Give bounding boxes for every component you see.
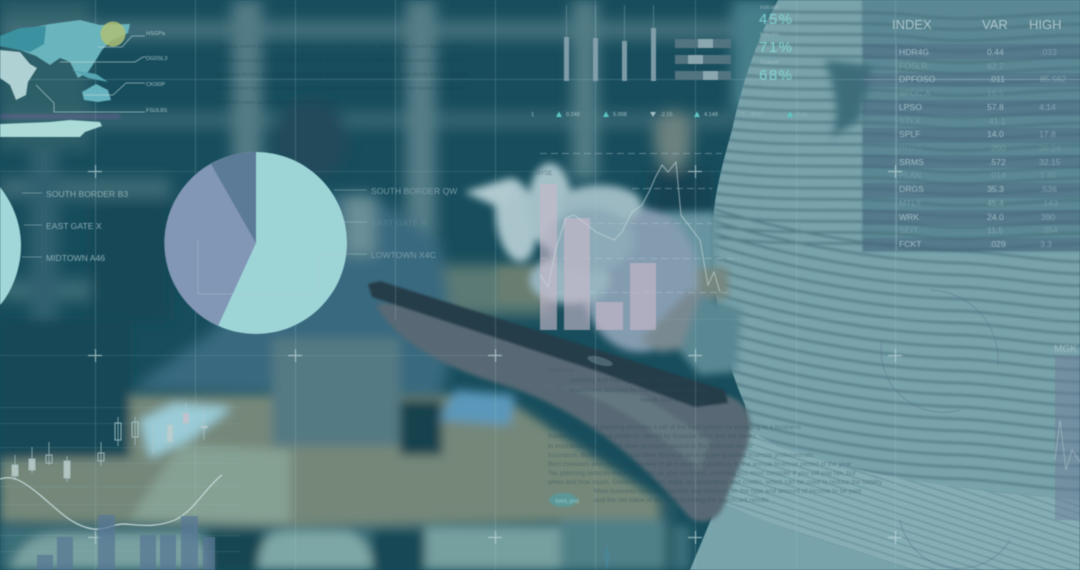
dashed levels [540, 154, 740, 292]
candlestick chart [12, 403, 207, 482]
smooth curve [0, 475, 222, 529]
table rows: 24.0 [987, 212, 1004, 222]
pie chart [164, 152, 347, 334]
bar and line chart over hand [536, 154, 740, 330]
paragraph text over forearm: in insurance markets and other accounts related to the financial sector [548, 443, 754, 450]
paragraph text over forearm: investment returned by earnings of the market [570, 387, 705, 394]
sweater body [690, 0, 1080, 570]
ticker row: 4.148 [704, 112, 718, 118]
forearm and hand [376, 303, 750, 521]
map: australia [82, 84, 111, 102]
labels: pie chart connectors: LOWTOWN X4C [371, 250, 436, 260]
table rows: 62.7 [987, 61, 1004, 71]
ticker row: -2.15 [660, 112, 673, 118]
table rows: DRGS [899, 184, 924, 194]
ticker row [531, 112, 808, 118]
table rows: FCKT [899, 239, 922, 249]
pink bars [540, 184, 656, 330]
map: callout lines [36, 36, 146, 112]
crosshair markers [88, 165, 902, 544]
table rows: .200 [989, 143, 1006, 153]
table rows: .029 [989, 239, 1006, 249]
table rows: 85.562 [1040, 74, 1067, 84]
paragraph text over forearm [547, 367, 883, 504]
decorative ring arcs on sweater [881, 290, 1010, 569]
table row bands [863, 44, 1080, 251]
paragraph text over forearm: and the net value of the fund including the significant results [594, 497, 770, 504]
table rows: 57.8 [987, 102, 1004, 112]
ticker row: 5.008 [613, 112, 627, 118]
bottom bar chart [37, 515, 215, 570]
paragraph text over forearm: when and how much. Government gives many tax deductions and credits, which can be used to reduce the liability [547, 479, 883, 486]
paragraph text over forearm: Financial [548, 367, 575, 374]
map: glow streak [0, 114, 120, 119]
table rows: 35.3 [987, 184, 1004, 194]
table rows: SEIT [899, 225, 919, 235]
table header: HIGH [1029, 17, 1062, 32]
table rows: PHAS [899, 143, 923, 153]
line series [540, 162, 720, 292]
paragraph text over forearm: trends and loan results [640, 397, 707, 404]
percentages panel: Channel [760, 60, 779, 66]
table rows: 41.1 [989, 116, 1006, 126]
pie slice: lavender [164, 152, 256, 326]
table rows: HDR4G [899, 47, 929, 57]
labels: left pie [22, 189, 128, 263]
percentages panel: Indicator [760, 32, 780, 38]
table rows: WRK [899, 212, 919, 222]
table rows: .572 [989, 157, 1006, 167]
table rows: 1.45 [1040, 170, 1057, 180]
pie slice: dark blue [211, 152, 256, 243]
table rows [899, 47, 1067, 249]
table header: VAR [982, 17, 1008, 32]
table rows: .014 [989, 170, 1006, 180]
percentages panel: 71% [759, 39, 794, 56]
map: eurasia [0, 20, 130, 78]
faint text block: top centre: Government reports and deductions for the current period and a review of the net market position here [218, 86, 467, 92]
map: antarctica [0, 120, 102, 137]
table header [892, 17, 1062, 32]
map: callout labels: FSUL8S [146, 108, 167, 114]
side chart: MGK [1054, 344, 1080, 520]
labels: left pie: MIDTOWN A46 [46, 253, 105, 263]
table rows: MTLY [899, 198, 922, 208]
paragraph text over forearm: Banking: services and products offered by financial firms and the banks [548, 433, 757, 440]
table rows: .354 [1041, 225, 1058, 235]
table rows: SRMS [899, 157, 924, 167]
faint text block: top centre [218, 44, 472, 106]
table rows: 17.8 [1039, 129, 1056, 139]
paragraph text over forearm: Most business income is taxable and depends on the type and amount of income to be paid [594, 488, 862, 495]
ticker row: 9047 [751, 112, 763, 118]
map: africa [0, 50, 37, 100]
top bar chart [564, 5, 656, 81]
table rows: 4.14 [1039, 102, 1056, 112]
diamond marker [604, 544, 610, 570]
desk and lower room [0, 320, 690, 570]
map: yellow highlight [100, 22, 126, 46]
window frames and blurred office background [0, 0, 778, 400]
table rows: 390 [1041, 212, 1056, 222]
ticker row: 0.21 [797, 112, 808, 118]
tablet [368, 281, 728, 407]
faint text block: top centre: Investment products and financial planning of the annual budget with the overall portfolio and returns [218, 58, 463, 64]
faint text block: top centre: Banking market performance and general market index summary report for the current quarter and fiscal [218, 44, 472, 50]
paragraph text over forearm: Advice: Financial planning provides a set of the best options for investing in a business [548, 424, 802, 431]
ticker row: 1 [531, 112, 534, 118]
table rows: 16.5 [987, 88, 1004, 98]
paragraph text over forearm: Insurance, Business, taxes and other financial services are qualified financial professionals. [548, 452, 815, 459]
map: callout labels: HSGPa [146, 31, 166, 37]
map: callout labels: CK0I0P [146, 82, 166, 88]
map: callout labels: DG0SL3 [146, 56, 167, 62]
table rows: 32.15 [1039, 157, 1061, 167]
table rows: .143 [1041, 198, 1058, 208]
table rows: DPFOSO [899, 74, 936, 84]
paragraph text over forearm: Tax planning reduces the income tax on your business, meaning you must consider if you will pay tax, but [548, 470, 856, 477]
map: callout labels [146, 31, 167, 114]
table rows: SPLF [899, 129, 920, 139]
table rows: 45.4 [987, 198, 1004, 208]
ticker row: 0.248 [566, 112, 580, 118]
heat strips [675, 39, 731, 80]
paragraph text over forearm: Best investors also report and review of all investment products in the annual financial period of the year [548, 461, 852, 468]
percentages panel: 68% [759, 67, 794, 84]
table rows: 14.0 [987, 129, 1004, 139]
faint text block: top centre: Business income and expenditure trends in the current quarter against the prior period and the forecast [218, 72, 469, 78]
table rows: .033 [1040, 47, 1057, 57]
labels: left pie: SOUTH BORDER B3 [46, 189, 128, 199]
paragraph text over forearm: planning and management of the personal accounts [570, 377, 722, 384]
table rows: LPSO [899, 102, 922, 112]
index table [863, 17, 1080, 250]
small teal logo mark [549, 493, 579, 507]
table rows: 3.3 [1040, 239, 1052, 249]
faint text block: top centre: Fund allocation and the significant market results [218, 100, 337, 106]
percentages panel: 45% [759, 11, 794, 28]
typing hand [464, 163, 742, 375]
labels: pie chart connectors: SOUTH BORDER QW [371, 186, 458, 196]
world map with callouts [0, 20, 167, 137]
labels: pie chart connectors: EAST GATE R [371, 218, 427, 228]
table rows: 20.24 [1039, 143, 1061, 153]
map: west asia darker [0, 26, 46, 52]
table header: INDEX [892, 17, 932, 32]
labels: left pie: EAST GATE X [46, 221, 102, 231]
map: islands [72, 70, 108, 82]
table rows: .536 [1040, 184, 1057, 194]
chart caption: NYSE [536, 171, 552, 177]
table rows: 11.5 [987, 225, 1003, 235]
table rows: .011 [989, 74, 1005, 84]
table rows: 0.44 [987, 47, 1004, 57]
partial pie chart at left edge [0, 187, 21, 305]
side chart: MGK: MGK [1054, 344, 1077, 355]
percentages panel: Indicator [760, 5, 780, 11]
small teal logo mark: WetLand [555, 499, 579, 505]
table rows: SPDC A [899, 88, 931, 98]
percentages panel [759, 5, 794, 84]
cuff [726, 432, 1080, 570]
table rows: FOSLR [899, 61, 928, 71]
labels: pie chart connectors [198, 186, 458, 294]
table rows: PLAN [899, 170, 921, 180]
table rows: STLX [899, 116, 921, 126]
